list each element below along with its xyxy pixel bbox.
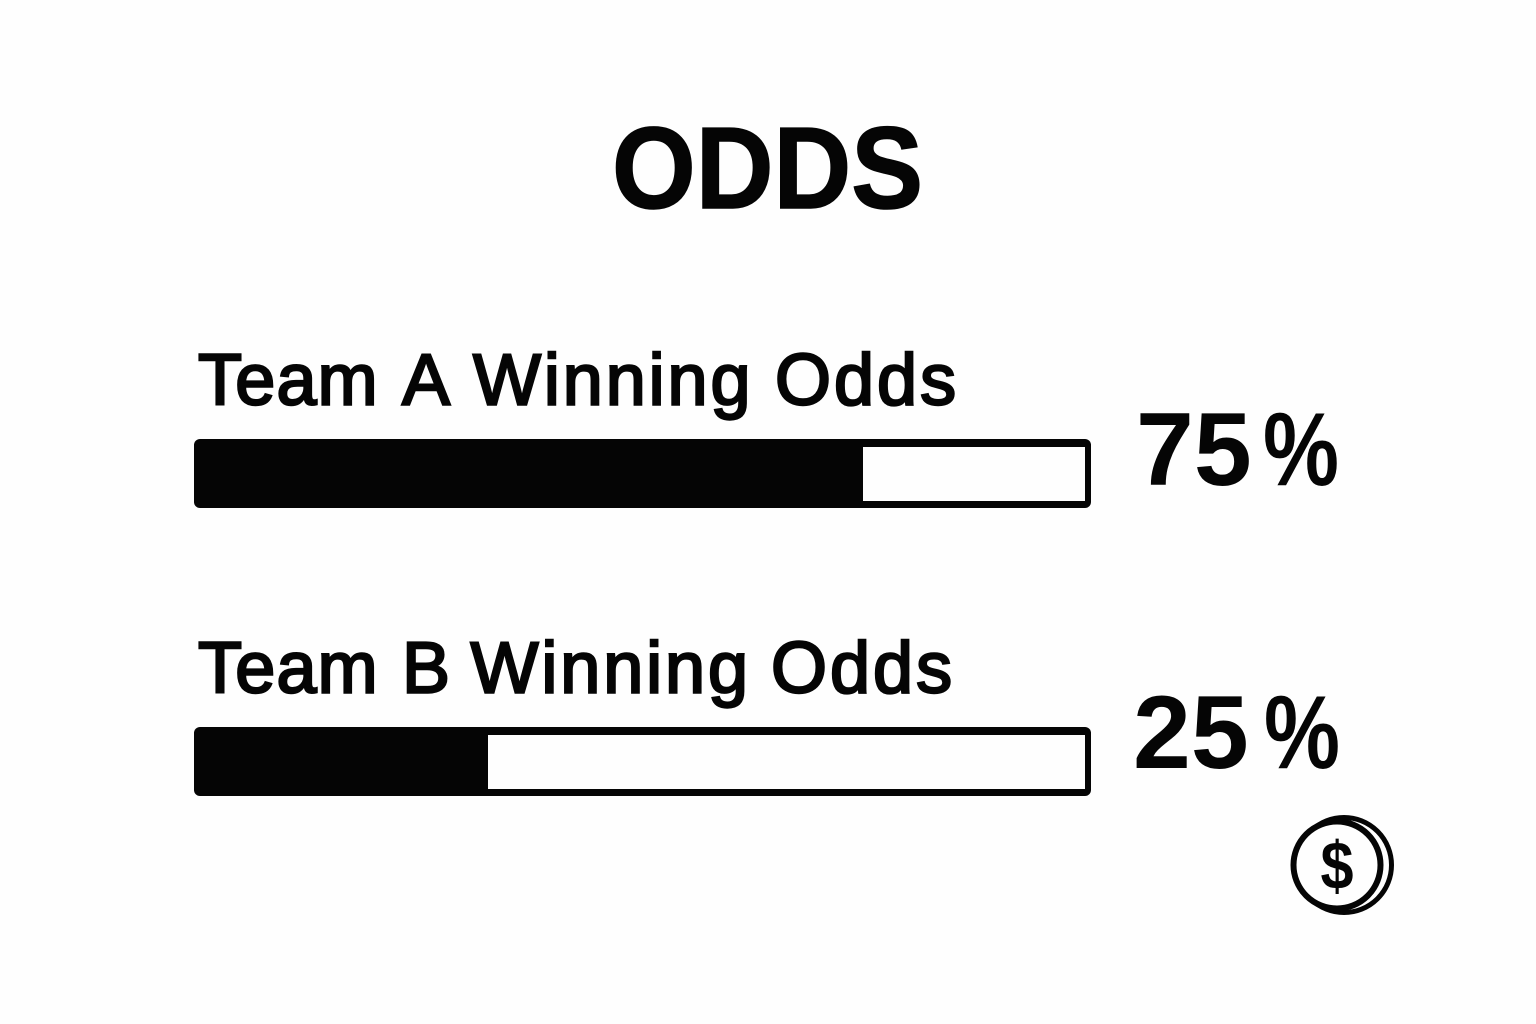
progress bar: Team B 25% (194, 727, 1091, 796)
value: 75%: % (1263, 392, 1339, 508)
label: Team B: B (402, 628, 450, 708)
title: ODDS (612, 103, 923, 233)
icon: dollar coin: $ (1320, 828, 1354, 904)
value: 75%: 75 (1136, 392, 1252, 508)
panel: Team A odds (194, 340, 1339, 508)
panel: Team B odds (194, 628, 1340, 796)
icon: dollar coin (1294, 818, 1392, 912)
label: Team B: Winning (470, 628, 751, 708)
progress bar: Team A 75% (194, 439, 1091, 508)
label: Team A: Team (198, 340, 379, 420)
label: Team A: A (402, 340, 450, 420)
label: Team B: Team (198, 628, 379, 708)
value: 25%: % (1264, 675, 1340, 791)
label: Team B: Odds (771, 628, 955, 708)
value: 75% (1136, 392, 1339, 508)
label: Team A: Winning (473, 340, 753, 420)
value: 25%: 25 (1133, 675, 1249, 791)
value: 25% (1133, 675, 1340, 791)
label: Team A: Odds (775, 340, 959, 420)
